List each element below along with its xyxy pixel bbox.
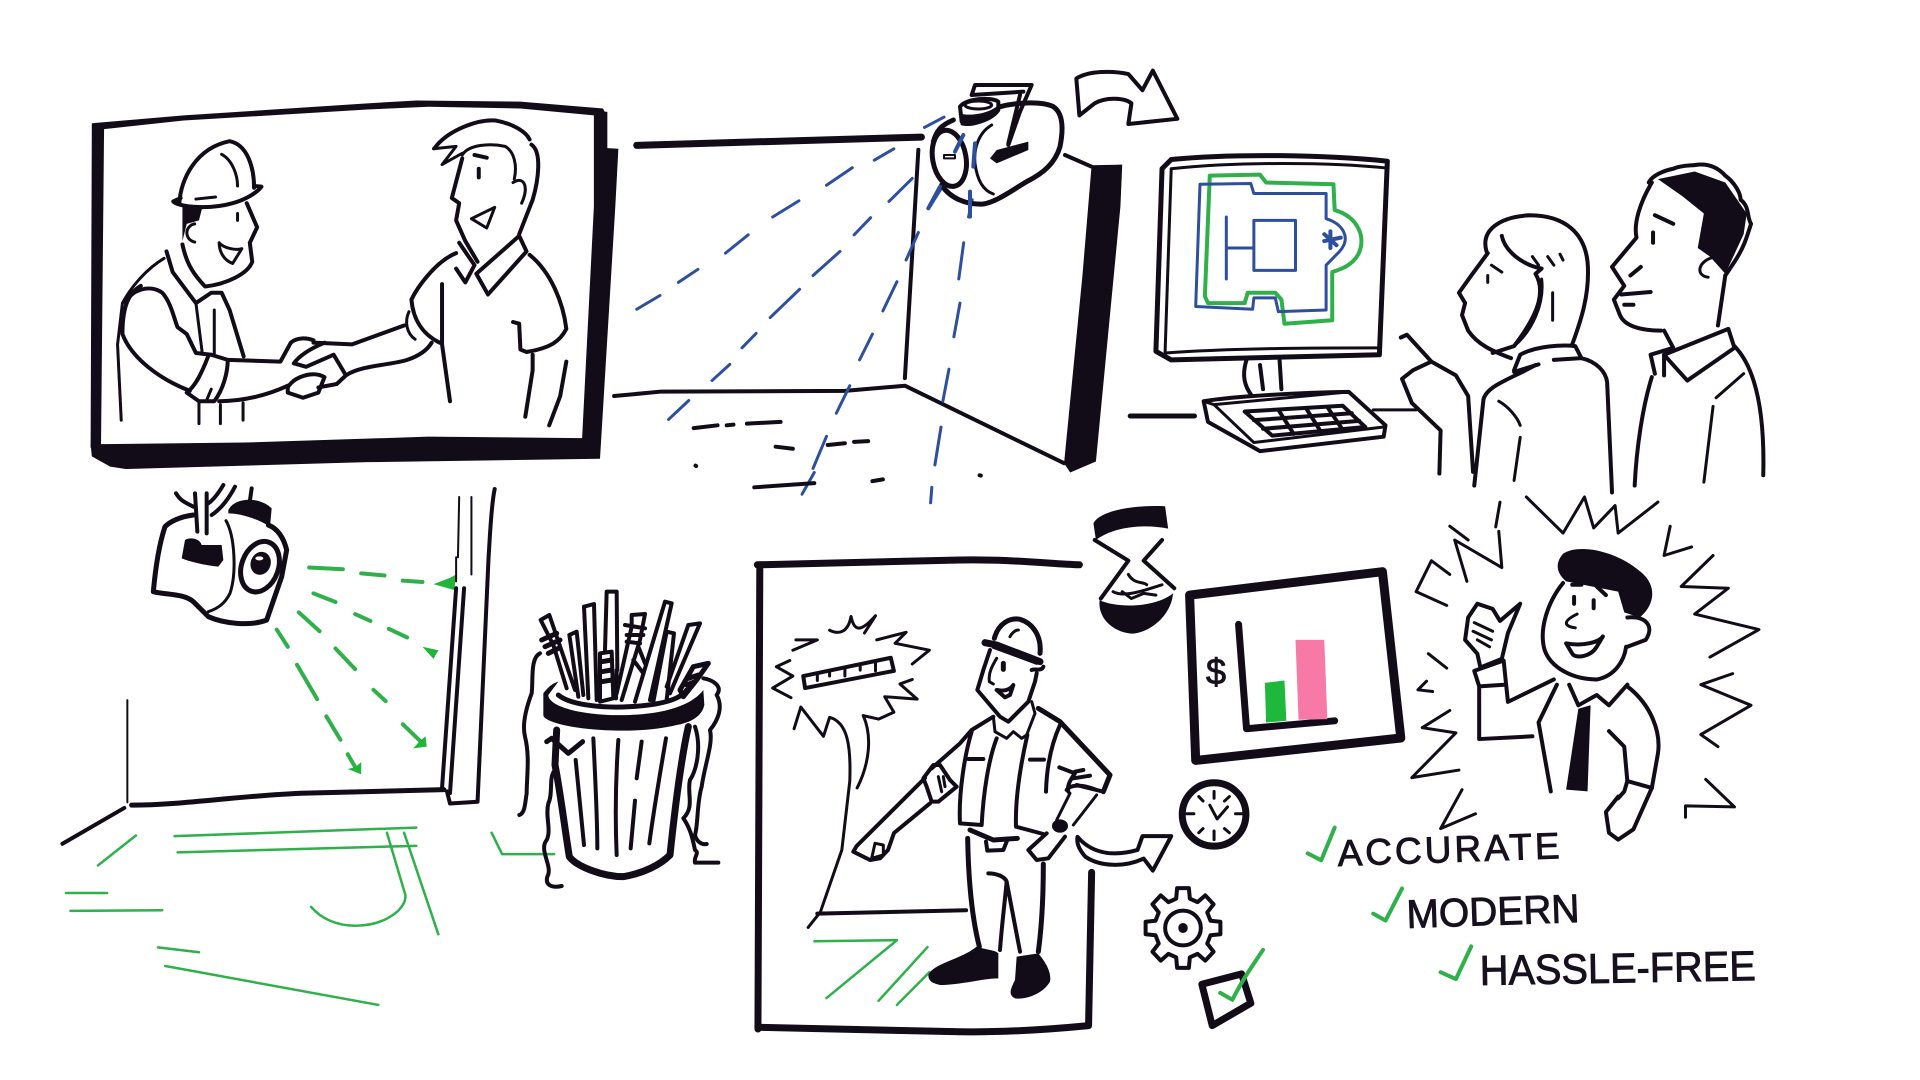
man shaking hands bbox=[288, 120, 566, 425]
icon: laser scanner on tripod bbox=[153, 485, 287, 624]
chart axis label: $ bbox=[1206, 651, 1226, 692]
bar chart bbox=[1190, 572, 1401, 760]
thought burst with ruler bbox=[773, 616, 966, 927]
inspector figure pointing at floor bbox=[853, 619, 1110, 999]
room corner with door frame bbox=[62, 489, 554, 1005]
panel frame bbox=[91, 101, 618, 469]
keyboard bbox=[1130, 392, 1416, 451]
panel frame bbox=[757, 560, 1092, 1032]
text: hassle-free: HASSLE-FREE bbox=[1479, 942, 1756, 994]
monitor bbox=[1156, 156, 1387, 394]
tools in can bbox=[541, 592, 708, 702]
icon: gear bbox=[1146, 888, 1220, 968]
floor plan bbox=[1196, 175, 1361, 324]
text: modern: MODERN bbox=[1406, 887, 1580, 937]
panel: handshake bbox=[91, 101, 618, 469]
arrow: inspector to clock bbox=[1077, 836, 1171, 871]
sparkle burst around happy man bbox=[1412, 497, 1759, 829]
arrow: scan to computer bbox=[1076, 71, 1177, 124]
wires bbox=[519, 653, 720, 887]
icon: clock bbox=[1182, 783, 1246, 846]
can body bbox=[543, 682, 704, 877]
green check marks bbox=[1308, 828, 1471, 979]
icon: ceiling laser scanner bbox=[928, 85, 1092, 217]
icon: trash can full of tools bbox=[519, 592, 720, 887]
panel: computer with floor plan bbox=[1130, 156, 1416, 451]
woman pointing at screen bbox=[1401, 215, 1612, 492]
man with curly hair bbox=[1612, 164, 1763, 486]
panel: inspector frame and measurement bbox=[757, 560, 1092, 1032]
room with blue scan lines bbox=[614, 117, 1122, 503]
icon: checkbox with green tick bbox=[1202, 950, 1263, 1026]
worker in hard hat bbox=[118, 141, 313, 424]
green floor plan lines bbox=[66, 828, 554, 1005]
checklist text bbox=[1337, 825, 1756, 994]
green scan beams bbox=[277, 568, 456, 774]
wall edge band bbox=[1064, 165, 1122, 473]
green floor lines bbox=[814, 940, 929, 1005]
happy businessman with thumbs up bbox=[1465, 549, 1659, 840]
text: accurate: ACCURATE bbox=[1337, 825, 1560, 874]
icon: hourglass bbox=[1093, 506, 1174, 634]
